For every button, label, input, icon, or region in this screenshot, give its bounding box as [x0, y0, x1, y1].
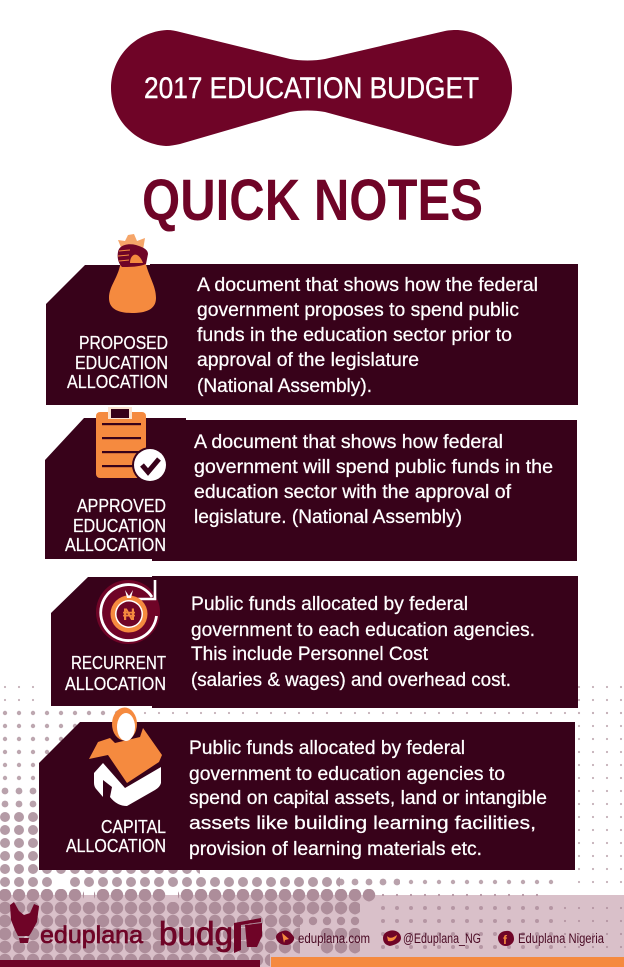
icon: house with coin: [89, 708, 162, 806]
label: proposed education allocation: EDUCATION: [75, 353, 168, 373]
description: capital allocation: provision of learning materials etc.: [189, 839, 482, 860]
link: facebook: Eduplana Nigeria: [518, 931, 604, 946]
description: proposed allocation: government proposes to spend public: [197, 300, 519, 321]
label: capital allocation: CAPITAL: [101, 817, 166, 837]
icon: clipboard with check: [96, 407, 168, 483]
description: approved allocation: [194, 432, 553, 528]
description: proposed allocation: approval of the legislature: [197, 350, 419, 371]
link: facebook: [498, 931, 604, 947]
link: twitter: [383, 930, 481, 946]
label: capital allocation: ALLOCATION: [66, 836, 166, 856]
footer bar: maroon: [0, 960, 260, 967]
description: approved allocation: A document that shows how federal: [194, 432, 503, 453]
label: approved education allocation: ALLOCATION: [65, 535, 166, 555]
description: capital allocation: spend on capital assets, land or intangible: [189, 788, 547, 809]
description: proposed allocation: A document that shows how the federal: [197, 275, 538, 296]
link: facebook: f: [503, 933, 508, 947]
description: approved allocation: education sector with the approval of: [194, 482, 512, 503]
footer bar: orange: [271, 957, 624, 967]
link: website: eduplana.com: [298, 931, 370, 946]
label: approved education allocation: APPROVED: [77, 496, 166, 516]
panel: recurrent allocation: [51, 576, 578, 708]
label: proposed education allocation: PROPOSED: [79, 333, 168, 353]
description: approved allocation: government will spend public funds in the: [194, 457, 553, 478]
description: proposed allocation: funds in the education sector prior to: [197, 325, 512, 346]
link: website: [276, 931, 370, 946]
label: recurrent allocation: [65, 653, 166, 694]
description: proposed allocation: (National Assembly).: [197, 376, 372, 397]
icon: recurring naira bag: [96, 580, 160, 644]
footer: logos and social links: [0, 902, 624, 967]
description: recurrent allocation: government to each education agencies.: [191, 620, 535, 641]
description: recurrent allocation: Public funds allocated by federal: [191, 594, 468, 615]
logo: eduplana: [10, 902, 144, 949]
panel: capital allocation: [39, 708, 575, 870]
label: approved education allocation: EDUCATION: [73, 516, 166, 536]
description: approved allocation: legislature. (National Assembly): [194, 507, 462, 528]
description: capital allocation: assets like building learning facilities,: [189, 812, 536, 833]
title banner: [111, 30, 512, 146]
background halftone dots and footer band: [0, 681, 624, 967]
description: recurrent allocation: This include Personnel Cost: [191, 644, 429, 665]
label: approved education allocation: [65, 496, 166, 555]
icon: money bag: [109, 234, 156, 313]
logo: budgit: budg: [159, 915, 233, 952]
logo: eduplana: eduplana: [40, 922, 144, 949]
description: capital allocation: government to education agencies to: [189, 764, 505, 785]
icon: recurring naira bag: ₦: [123, 605, 136, 624]
logo: budgit: [159, 915, 262, 953]
panel: approved education allocation: [45, 407, 577, 561]
description: recurrent allocation: (salaries & wages) and overhead cost.: [191, 670, 511, 691]
banner title text: 2017 EDUCATION BUDGET: [144, 72, 479, 105]
link: twitter: @Eduplana_NG: [403, 931, 481, 946]
label: recurrent allocation: RECURRENT: [71, 653, 166, 673]
label: proposed education allocation: ALLOCATION: [67, 372, 168, 392]
description: capital allocation: Public funds allocated by federal: [189, 738, 465, 759]
label: capital allocation: [66, 817, 166, 856]
panel: proposed education allocation: [46, 234, 578, 405]
label: proposed education allocation: [67, 333, 168, 392]
label: recurrent allocation: ALLOCATION: [65, 674, 166, 694]
description: capital allocation: [189, 738, 547, 860]
description: proposed allocation: [197, 275, 538, 397]
description: recurrent allocation: [191, 594, 535, 691]
heading: quick notes: QUICK NOTES: [142, 168, 483, 233]
